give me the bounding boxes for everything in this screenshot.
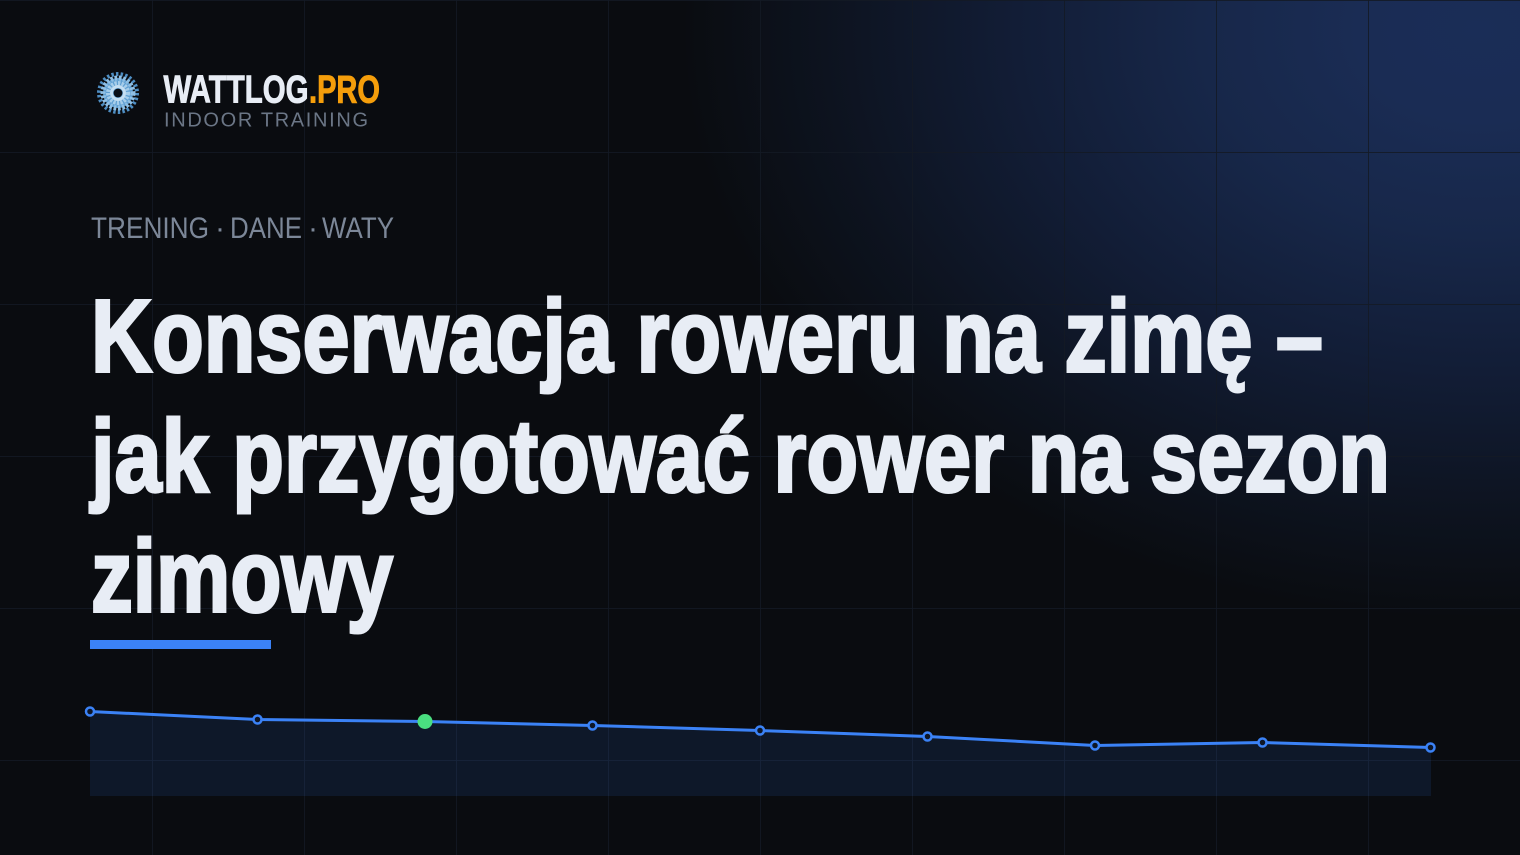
eyebrow text: TRENING [91, 212, 209, 245]
title underline accent [90, 640, 271, 649]
logo [99, 68, 380, 132]
brand name: WATTLOG [164, 68, 308, 112]
chart markers [86, 708, 1434, 752]
title line 3: zimowy [91, 518, 393, 634]
highlighted point [418, 714, 432, 729]
title [89, 278, 1390, 634]
brand tagline: INDOOR TRAINING [164, 110, 368, 132]
icon: cassette gear [99, 74, 137, 112]
chart area fill [90, 712, 1431, 796]
eyebrow text: · [308, 212, 318, 245]
eyebrow text: · [215, 212, 225, 245]
chart line [90, 712, 1431, 748]
eyebrow text: WATY [322, 212, 394, 245]
line chart [86, 708, 1434, 796]
brand name accent: .PRO [309, 68, 380, 112]
eyebrow text [91, 212, 394, 245]
eyebrow text: DANE [230, 212, 302, 245]
